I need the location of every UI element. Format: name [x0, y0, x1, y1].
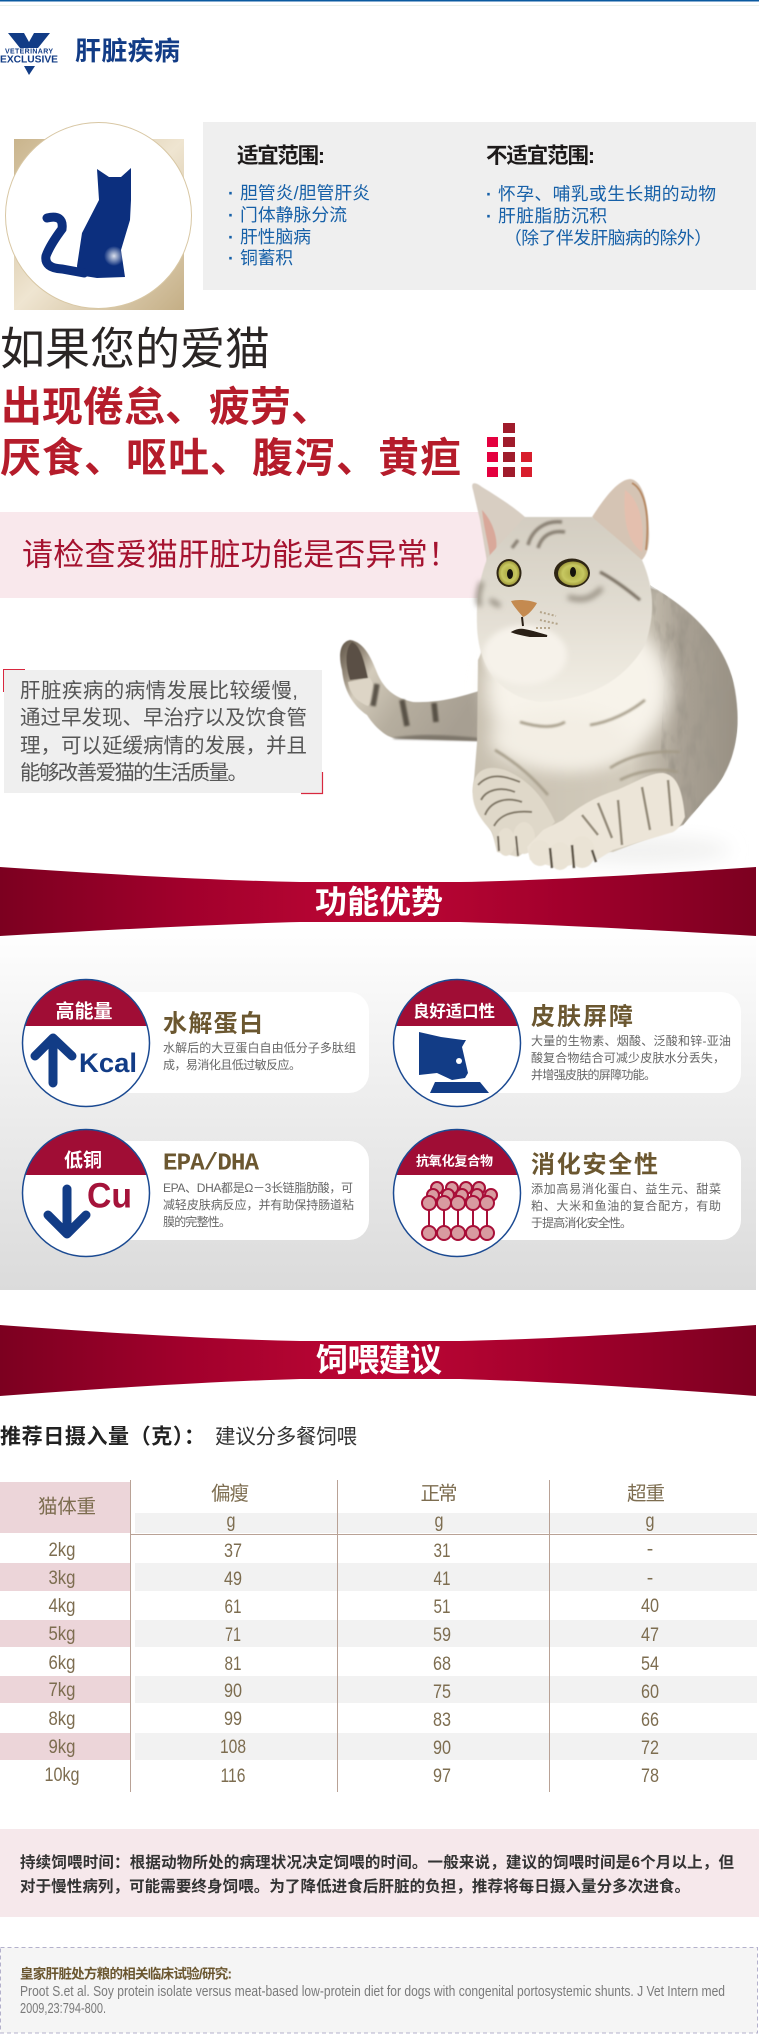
table rows: 83: [433, 1709, 451, 1731]
table rows: 108: [220, 1736, 246, 1758]
table rows: -: [647, 1567, 653, 1589]
card body: 粕、大米和鱼油的复合配方，有助: [531, 1198, 721, 1213]
card body: 于提高消化安全性。: [531, 1215, 632, 1230]
symptoms text: 呕吐、: [126, 435, 252, 481]
icon: palatability: [394, 980, 520, 1106]
list: not suitable: ·: [486, 184, 492, 204]
table header: 正常: [420, 1483, 458, 1505]
table rows: 78: [641, 1765, 659, 1787]
list: not suitable: [486, 184, 716, 248]
table header: g: [226, 1510, 236, 1532]
banner: benefits: [0, 867, 756, 936]
heading: suitable: 适宜范围:: [237, 144, 325, 168]
icon: low copper: [22, 1130, 150, 1256]
table rows: 31: [434, 1540, 450, 1562]
card: digestive safety: [394, 1130, 741, 1256]
table rows: 47: [641, 1624, 659, 1646]
card heading: 皮肤屏障: [531, 1004, 633, 1030]
table rows: 5kg: [48, 1623, 76, 1645]
callout: check liver: [0, 512, 495, 598]
title: 肝脏疾病: [75, 36, 180, 66]
table rows: 75: [433, 1681, 451, 1703]
symptoms text: 黄疸: [378, 435, 462, 481]
list: suitable: [228, 183, 370, 268]
top rule: [0, 0, 759, 2]
list: suitable: 肝性脑病: [240, 227, 311, 247]
icon: palatability: 良好适口性: [413, 1001, 495, 1021]
note: feeding duration: 持续饲喂时间：根据动物所处的病理状况决定饲喂的时间。一般来说，建议的饲喂时间是6个月以上，但: [20, 1852, 734, 1872]
text block: disease note: 理，可以延缓病情的发展，并且: [20, 734, 307, 758]
icon: antioxidant: [394, 1130, 520, 1256]
symptoms text: 腹泻、: [252, 435, 378, 481]
panel: suitability: [203, 122, 756, 290]
text block: disease note: 肝脏疾病的病情发展比较缓慢,: [20, 680, 298, 702]
list: suitable: 胆管炎/胆管肝炎: [240, 183, 370, 203]
note: feeding duration: 对于慢性病列，可能需要终身饲喂。为了降低进食后肝脏的负担，推荐将每日摄入量分多次进食。: [20, 1876, 690, 1896]
table rows: 41: [434, 1568, 450, 1590]
list: suitable: ·: [228, 227, 234, 247]
cat head: [477, 517, 652, 702]
icon: high energy: [22, 980, 150, 1106]
card: skin barrier: [394, 980, 741, 1106]
symptoms text: 出现倦怠、: [1, 384, 206, 430]
table header: 偏瘦: [211, 1483, 249, 1505]
table rows: 7kg: [48, 1679, 76, 1701]
table rows: 37: [224, 1540, 242, 1562]
table rows: 97: [433, 1765, 451, 1787]
banner: feeding: 饲喂建议: [316, 1342, 442, 1378]
cat eyes: [496, 558, 590, 588]
logo: veterinary exclusive: [0, 33, 58, 75]
heading: recommended daily intake: 建议分多餐饲喂: [215, 1426, 357, 1448]
list: suitable: ·: [228, 205, 234, 225]
banner: feeding: [0, 1325, 756, 1396]
list: suitable: ·: [228, 248, 234, 268]
heading: not suitable: 不适宜范围:: [486, 144, 595, 168]
table rows: 40: [641, 1595, 659, 1617]
symptoms text: 疲劳、: [209, 384, 332, 430]
section background: benefits: [0, 924, 756, 1290]
card: hydrolysed protein: [22, 980, 369, 1106]
card: EPA DHA: [22, 1130, 369, 1256]
card body: 成，易消化且低过敏反应。: [163, 1057, 301, 1072]
table rows: 10kg: [44, 1764, 80, 1786]
table header: [38, 1483, 665, 1532]
icon: low copper: Cu: [87, 1176, 132, 1216]
note: feeding duration: [0, 1829, 759, 1917]
table rows: 99: [224, 1708, 242, 1730]
card body: EPA、DHA都是Ω－3长链脂肪酸，可: [163, 1180, 353, 1195]
card heading: EPA/DHA: [163, 1150, 260, 1178]
table rows: 8kg: [48, 1708, 76, 1730]
cat nose and mouth: [511, 600, 558, 636]
table rows: [44, 1538, 659, 1787]
panel: references: [0, 1948, 758, 2033]
card body: 添加高易消化蛋白、益生元、甜菜: [531, 1181, 721, 1196]
heading: if your cat: 如果您的爱猫: [0, 324, 270, 374]
card body: [163, 1040, 356, 1072]
list: suitable: 铜蓄积: [240, 248, 293, 268]
list: suitable: 门体静脉分流: [240, 205, 347, 225]
icon: low copper: 低铜: [64, 1150, 102, 1172]
card body: [163, 1180, 354, 1229]
list: suitable: ·: [228, 183, 234, 203]
table rows: 71: [225, 1624, 241, 1646]
panel: references: 2009,23:794-800.: [20, 2001, 106, 2017]
icon: high energy: 高能量: [56, 1000, 112, 1022]
text block: disease note: [4, 670, 322, 794]
table rows: 59: [433, 1624, 451, 1646]
table rows: 2kg: [48, 1539, 76, 1561]
table rows: 6kg: [48, 1652, 76, 1674]
card body: [531, 1033, 731, 1082]
table rows: 54: [641, 1653, 659, 1675]
list: not suitable: 肝脏脂肪沉积: [498, 206, 607, 226]
card body: 酸复合物结合可减少皮肤水分丢失，: [531, 1050, 725, 1065]
table header: 超重: [627, 1483, 665, 1505]
icon: high energy: Kcal: [79, 1048, 137, 1078]
table rows: 60: [641, 1681, 659, 1703]
card body: 膜的完整性。: [163, 1214, 231, 1229]
banner: benefits: 功能优势: [315, 884, 443, 920]
card body: 并增强皮肤的屏障功能。: [531, 1067, 656, 1082]
list: not suitable: （除了伴发肝脑病的除外）: [504, 228, 712, 248]
table rows: -: [647, 1538, 653, 1560]
icon: cat in circle: [6, 122, 192, 310]
photo: tabby cat: [340, 479, 745, 870]
cat forelegs: [473, 768, 685, 870]
card heading: 消化安全性: [531, 1152, 658, 1178]
card body: 减轻皮肤病反应，并有助保持肠道粘: [163, 1197, 354, 1212]
table: feeding amounts: [0, 1480, 757, 1792]
table header: g: [434, 1510, 444, 1532]
logo: veterinary exclusive: VETERINARY: [5, 48, 53, 56]
text block: disease note: 能够改善爱猫的生活质量。: [20, 762, 248, 784]
card body: [531, 1181, 721, 1230]
symptoms text: [0, 384, 462, 481]
icon: red squares: [487, 423, 532, 477]
card body: 水解后的大豆蛋白自由低分子多肽组: [163, 1040, 356, 1055]
table header: g: [646, 1510, 654, 1532]
logo: veterinary exclusive: EXCLUSIVE: [0, 54, 58, 66]
table header: 猫体重: [38, 1496, 96, 1518]
card heading: 水解蛋白: [163, 1010, 263, 1038]
table rows: 81: [224, 1653, 242, 1675]
table rows: 116: [220, 1765, 246, 1787]
list: not suitable: ·: [486, 206, 492, 226]
table rows: 90: [224, 1680, 242, 1702]
table rows: 4kg: [48, 1595, 76, 1617]
card body: 大量的生物素、烟酸、泛酸和锌-亚油: [531, 1033, 731, 1048]
panel: references: 皇家肝脏处方粮的相关临床试验/研究:: [20, 1966, 232, 1982]
heading: recommended daily intake: [0, 1426, 357, 1448]
table rows: 49: [224, 1568, 242, 1590]
table rows: 68: [433, 1653, 451, 1675]
table rows: 51: [434, 1596, 450, 1618]
heading: recommended daily intake: 推荐日摄入量（克）：: [0, 1426, 205, 1448]
cat ears: [472, 479, 649, 580]
table rows: 72: [641, 1737, 659, 1759]
table rows: 3kg: [48, 1567, 76, 1589]
list: not suitable: 怀孕、哺乳或生长期的动物: [498, 184, 716, 204]
table rows: 90: [433, 1737, 451, 1759]
table rows: 66: [641, 1709, 659, 1731]
table rows: 61: [224, 1596, 242, 1618]
text block: disease note: 通过早发现、早治疗以及饮食管: [20, 706, 307, 730]
symptoms text: 厌食、: [0, 435, 126, 481]
cat body: [473, 585, 738, 852]
callout: check liver: 请检查爱猫肝脏功能是否异常！: [22, 538, 459, 572]
table rows: 9kg: [48, 1736, 76, 1758]
icon: antioxidant: 抗氧化复合物: [416, 1154, 493, 1168]
